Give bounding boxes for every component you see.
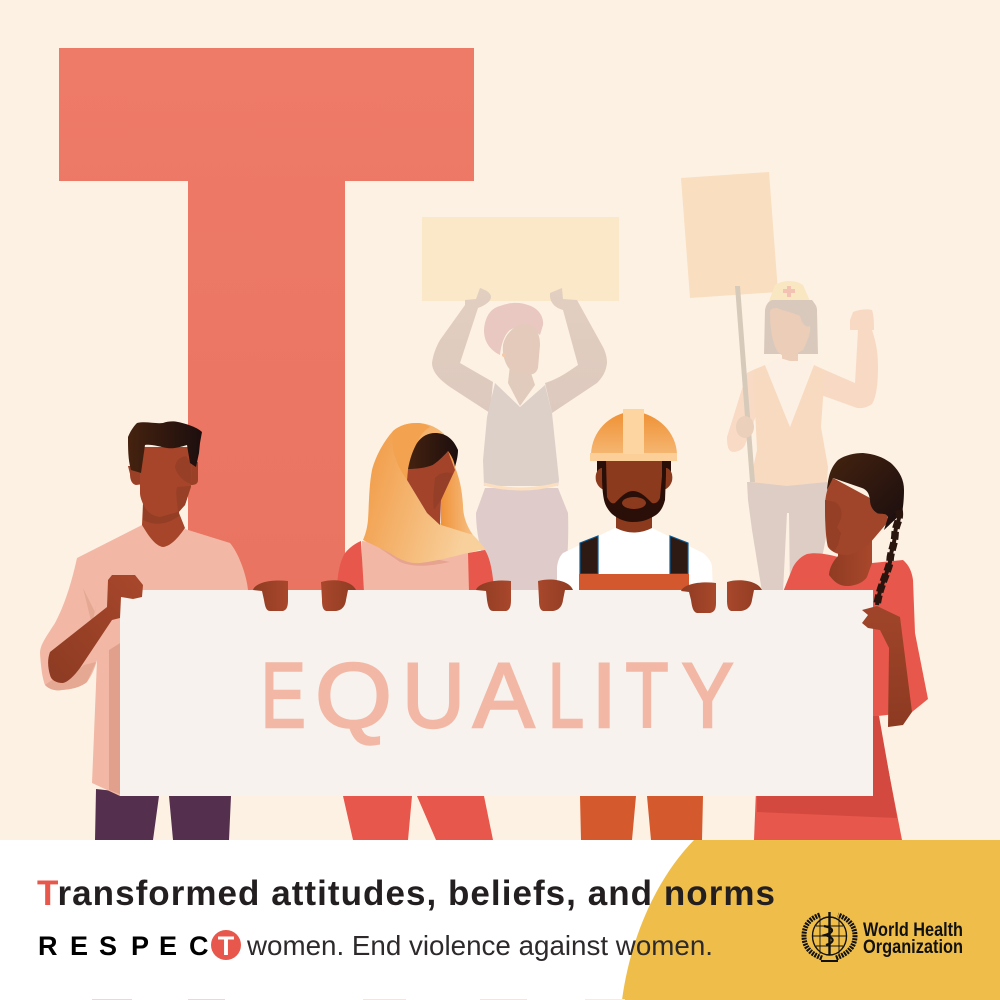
sign word: Y xyxy=(682,645,734,747)
hand on pole xyxy=(736,416,754,438)
hand 5 xyxy=(681,582,716,613)
white shirt xyxy=(557,528,713,592)
ears xyxy=(128,462,198,485)
red circle T xyxy=(211,930,241,960)
dress shadow xyxy=(757,716,897,818)
face xyxy=(407,451,455,525)
headline: Transformed attitudes, beliefs, and norms xyxy=(37,874,775,913)
vest xyxy=(750,365,828,486)
neck xyxy=(616,510,652,532)
helmet dome xyxy=(591,411,677,454)
red sleeves xyxy=(337,541,494,592)
sign word: Q xyxy=(315,645,392,747)
red dress xyxy=(754,553,928,840)
nurse placard xyxy=(681,172,778,298)
shirt xyxy=(40,525,260,796)
WHO logo xyxy=(804,912,963,961)
hair xyxy=(128,421,202,473)
sign word xyxy=(261,645,734,747)
nurse neck xyxy=(782,350,798,368)
hand 4 xyxy=(538,579,573,611)
hair xyxy=(827,453,904,530)
red trousers xyxy=(343,796,493,840)
face xyxy=(825,478,888,555)
sign board xyxy=(120,590,873,796)
giant letter T xyxy=(59,48,474,592)
sign word: L xyxy=(548,645,584,747)
hair xyxy=(408,433,458,469)
head wrap xyxy=(484,303,543,355)
equality sign xyxy=(120,590,873,796)
woman with braid in red dress xyxy=(754,453,928,840)
left arm xyxy=(727,370,757,452)
sleeve shadow xyxy=(45,662,96,690)
helmet stripe xyxy=(623,409,644,454)
blouse xyxy=(362,541,470,592)
organization name line 2: Organization xyxy=(863,937,963,958)
headscarf xyxy=(363,423,485,563)
tagline: women. End violence against women. xyxy=(246,930,713,961)
ears xyxy=(596,468,672,490)
hands gripping sign xyxy=(48,575,912,727)
respect wordmark: RESPEC xyxy=(38,931,208,961)
nurse cap xyxy=(769,281,810,301)
face xyxy=(606,461,662,521)
raised right arm xyxy=(821,309,878,408)
scarf fold xyxy=(392,423,430,480)
sign word: I xyxy=(591,645,617,747)
footer yellow curve xyxy=(622,840,1000,1000)
neck xyxy=(508,365,535,406)
side hair xyxy=(597,461,671,473)
background protester with banner xyxy=(422,217,619,592)
sleeve fold xyxy=(83,588,97,625)
footer panel xyxy=(0,840,1000,1000)
orange trousers xyxy=(580,796,703,840)
earring xyxy=(502,353,506,357)
circle letter: T xyxy=(218,931,235,961)
emblem xyxy=(804,912,855,961)
face shadow xyxy=(825,500,842,552)
neck shadow xyxy=(143,505,179,524)
face xyxy=(503,324,540,374)
hand 1 xyxy=(253,580,288,611)
background nurse with placard xyxy=(681,172,878,592)
nurse trousers xyxy=(747,482,828,592)
overall bib xyxy=(579,574,689,592)
woman in orange headscarf xyxy=(337,423,494,840)
sign word: A xyxy=(473,645,535,747)
man arm and hand xyxy=(48,575,143,683)
nurse face xyxy=(770,308,810,357)
face xyxy=(140,447,192,517)
sign word: T xyxy=(626,645,668,747)
nurse hair xyxy=(764,300,818,354)
raised arms xyxy=(432,288,607,413)
neck xyxy=(142,503,185,547)
man in pink shirt xyxy=(40,421,260,840)
overall straps xyxy=(580,536,688,574)
scarf back panel xyxy=(441,433,473,535)
sign word: E xyxy=(261,645,306,747)
cap cross xyxy=(783,286,795,297)
placard pole xyxy=(735,286,755,482)
construction worker xyxy=(557,409,713,840)
beard and sideburns xyxy=(602,461,666,522)
hand 6 xyxy=(727,580,762,611)
neck xyxy=(829,536,872,586)
face shadow xyxy=(175,456,191,513)
torso xyxy=(483,383,559,486)
trousers xyxy=(95,789,231,840)
braid xyxy=(877,510,899,605)
woman arm and hand xyxy=(862,606,912,727)
campaign line xyxy=(38,930,713,961)
helmet brim xyxy=(590,453,677,461)
face shadow xyxy=(433,473,453,510)
sign word: U xyxy=(402,645,465,747)
blank yellow placard xyxy=(422,217,619,301)
belt xyxy=(484,484,558,489)
hand 3 xyxy=(476,580,511,611)
hand 2 xyxy=(321,580,356,611)
skirt xyxy=(476,488,568,592)
shirt shadow xyxy=(109,640,125,796)
organization name: World Health xyxy=(863,920,963,941)
scarf shadow xyxy=(378,547,450,566)
collar xyxy=(765,358,813,427)
mouth xyxy=(622,497,646,509)
